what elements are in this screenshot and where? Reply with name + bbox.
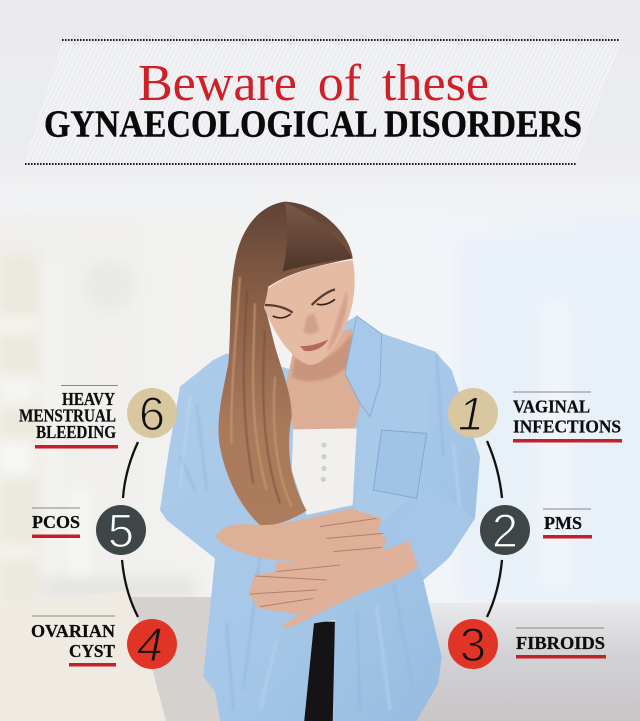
label: fibroids: [516, 628, 606, 658]
label: ovarian cyst: [31, 616, 116, 666]
label: heavy menstrual bleeding: BLEEDING: [36, 422, 116, 442]
face shade: [327, 290, 347, 353]
badge 6: 6: [139, 387, 165, 440]
badge 5: [96, 504, 146, 557]
neck shadow: [292, 333, 357, 381]
label: vaginal infections: [513, 392, 622, 442]
badge 4: 4: [137, 618, 163, 671]
neck and chest: [285, 328, 362, 429]
brow left: [265, 305, 293, 313]
trousers: [303, 620, 335, 721]
background: sofa right: [415, 603, 640, 721]
label: ovarian cyst: CYST: [69, 641, 115, 661]
badge 4: [127, 618, 177, 671]
title panel: hatched parallelogram: [24, 44, 620, 161]
hair crown right of parting: [283, 203, 353, 272]
shirt highlights: [180, 397, 460, 710]
bottom dotted rule: [25, 163, 577, 165]
background: header band: [0, 0, 640, 200]
shirt pocket: [373, 430, 427, 498]
label: PMS: [543, 509, 592, 538]
badge 6: [127, 387, 177, 440]
label: PMS: PMS: [544, 513, 582, 533]
hair shadows: [244, 290, 280, 503]
label: PCOS: [32, 508, 80, 538]
background: blurred room: [0, 185, 640, 721]
eye left: [273, 314, 291, 318]
badge 1: 1: [458, 387, 484, 440]
woman photo illustration: [160, 202, 480, 721]
face: [264, 260, 355, 365]
arm lower and lower hand: [248, 540, 418, 628]
badge 3: [448, 618, 498, 671]
badge 3: 3: [460, 618, 486, 671]
badge 5: 5: [108, 504, 134, 557]
nose shade: [303, 313, 319, 334]
title line 1: Beware of these: [138, 55, 489, 112]
badge 1: [448, 387, 498, 440]
white top: [292, 428, 357, 515]
shirt folds and shading: [180, 353, 443, 710]
eye right: [317, 299, 335, 305]
white top lower: [314, 603, 335, 622]
placket buttons: [321, 442, 327, 482]
left sleeve cuff: [160, 490, 232, 558]
shirt body: [160, 316, 480, 721]
title line 2: GYNAECOLOGICAL DISORDERS: [44, 104, 582, 146]
mouth: [300, 339, 328, 351]
arc connector 5 to 4: [122, 560, 138, 617]
label: fibroids: FIBROIDS: [516, 633, 605, 653]
badge 2: 2: [492, 504, 518, 557]
label: vaginal infections: VAGINAL: [513, 396, 590, 416]
background: fluffy blanket: [0, 590, 166, 721]
badge 2: [480, 504, 530, 557]
label: PCOS: PCOS: [32, 512, 80, 532]
shirt right panel: [345, 333, 435, 530]
label: heavy menstrual bleeding: HEAVY: [62, 389, 115, 409]
background: sofa middle: [120, 597, 230, 721]
right sleeve cuff: [390, 483, 475, 578]
arm upper: [215, 508, 387, 561]
arc connector 6 to 5: [123, 442, 138, 498]
label: heavy menstrual bleeding: MENSTRUAL: [19, 406, 116, 426]
shirt collar right: [345, 316, 382, 417]
hair back: [218, 202, 353, 525]
label: heavy menstrual bleeding: [19, 386, 118, 448]
top dotted rule: [62, 39, 620, 41]
brow right: [312, 289, 335, 305]
label: ovarian cyst: OVARIAN: [31, 621, 115, 641]
hair highlights: [231, 277, 292, 507]
arc connector 2 to 3: [487, 560, 502, 617]
finger lines: [250, 518, 383, 607]
label: vaginal infections: INFECTIONS: [513, 416, 621, 436]
arc connector 1 to 2: [487, 441, 502, 498]
